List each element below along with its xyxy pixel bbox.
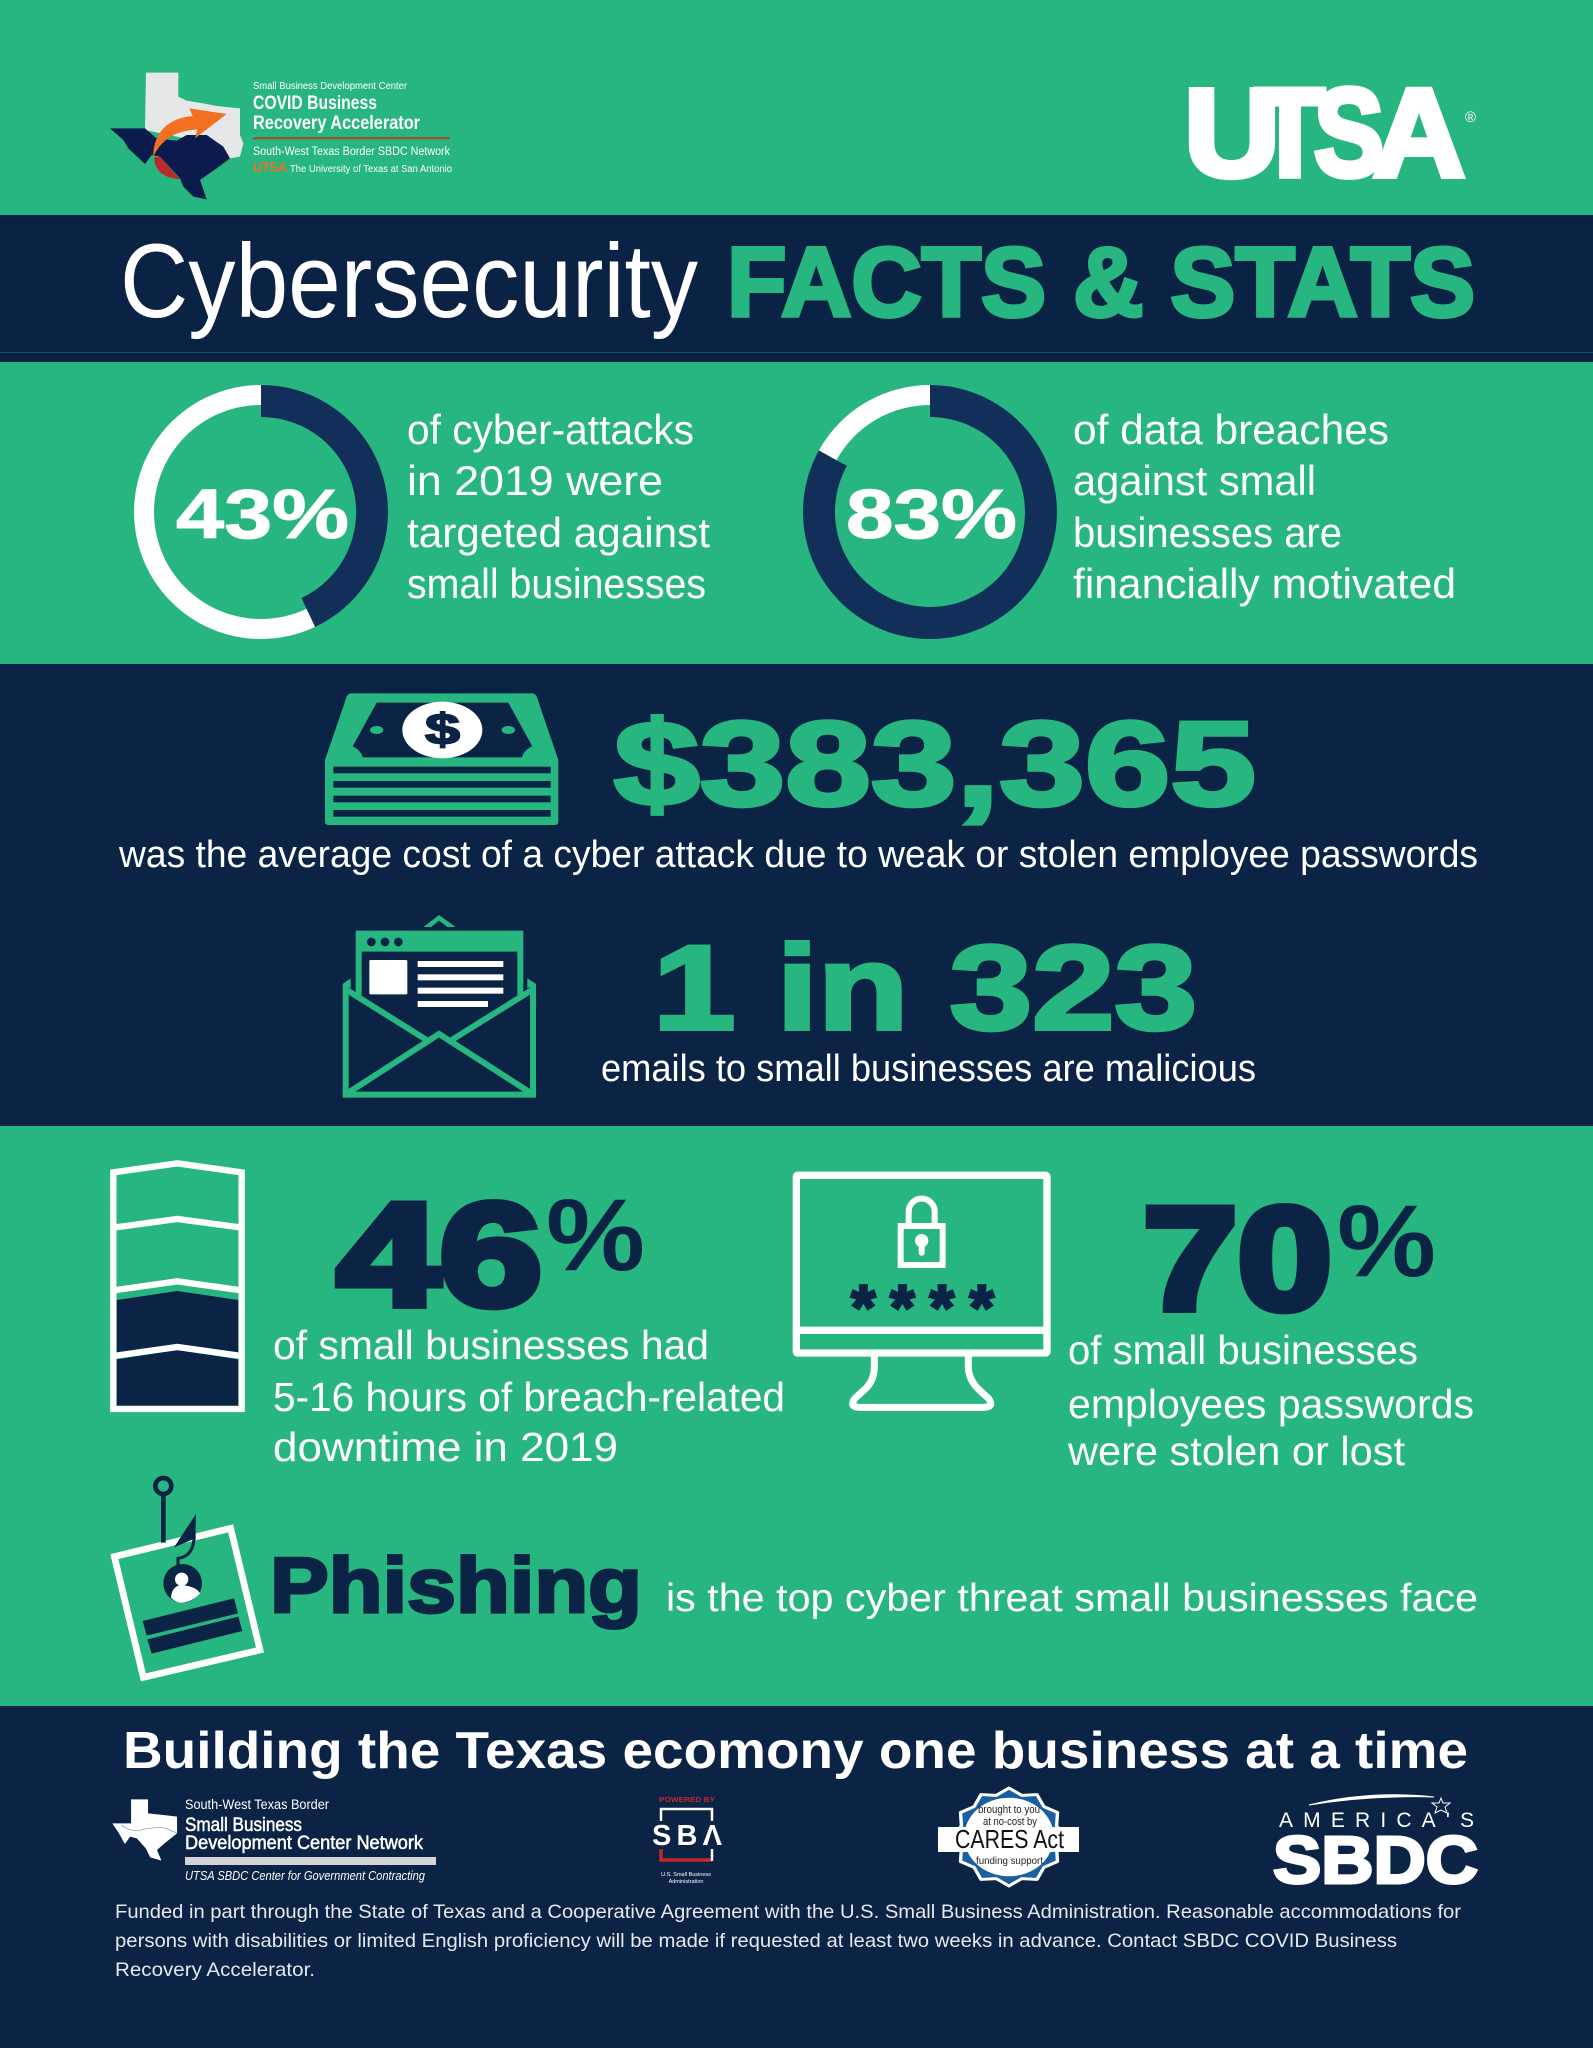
logo: COVID Business Recovery Accelerator: COVID Business	[253, 93, 377, 114]
donut chart: 43%	[134, 385, 388, 639]
logo: SBA	[652, 1795, 723, 1885]
text: 83% description: against small	[1073, 457, 1316, 504]
logo: South-West Texas Border SBDC Network: South-West Texas Border	[185, 1797, 329, 1812]
stat: $383,365	[118, 697, 1478, 876]
logo: COVID Business Recovery Accelerator: The University of Texas at San Antonio	[290, 164, 452, 175]
stat: Phishing: Phishing	[270, 1541, 642, 1629]
logo: South-West Texas Border SBDC Network: UTSA SBDC Center for Government Contracting	[185, 1869, 425, 1883]
text: 83% description	[1073, 406, 1456, 607]
logo: CARES Act funding support badge	[938, 1788, 1079, 1886]
logo: COVID Business Recovery Accelerator: UTSA	[253, 159, 287, 175]
logo: SBA: SBΛ	[652, 1820, 723, 1852]
logo: South-West Texas Border SBDC Network	[112, 1797, 436, 1883]
icon: money stack	[325, 684, 558, 825]
stat: 46%: 5-16 hours of breach-related	[273, 1374, 785, 1420]
icon: monitor with password	[796, 1175, 1047, 1407]
text: funding disclaimer	[115, 1901, 1462, 1981]
text: 83% description: of data breaches	[1073, 406, 1389, 453]
stat: 46%: 46	[337, 1173, 542, 1336]
logo: UTSA: U	[1184, 64, 1280, 203]
logo: COVID Business Recovery Accelerator: Small Business Development Center	[253, 80, 407, 92]
icon: monitor with password: ****	[851, 1273, 994, 1343]
logo: UTSA	[1184, 64, 1476, 203]
title	[120, 223, 1475, 340]
logo: CARES Act funding support badge: CARES Act	[955, 1824, 1065, 1854]
text: 83% description: businesses are	[1073, 509, 1342, 556]
heading: footer slogan: Building the Texas ecomony one business at a time	[123, 1722, 1468, 1780]
logo: COVID Business Recovery Accelerator: South-West Texas Border SBDC Network	[253, 146, 450, 158]
stat: 70%: %	[1337, 1184, 1436, 1298]
logo: America's SBDC: AMERICA'S	[1279, 1809, 1474, 1832]
stat: $383,365: $383,365	[614, 697, 1256, 831]
logo: SBA: Administration	[669, 1879, 703, 1885]
logo: COVID Business Recovery Accelerator	[110, 73, 452, 199]
panel: 83% stat	[803, 385, 1456, 639]
text: 43% description: small businesses	[407, 560, 706, 607]
stat: $383,365: was the average cost of a cyber attack due to weak or stolen employee passwords	[118, 834, 1478, 876]
stat: 70%	[1067, 1177, 1474, 1474]
stat: 46%	[273, 1173, 785, 1470]
stat: 46%: downtime in 2019	[273, 1424, 618, 1470]
logo: America's SBDC	[1273, 1795, 1478, 1898]
logo: UTSA: ®	[1465, 109, 1476, 126]
stat: 70%: 70	[1143, 1177, 1332, 1340]
logo: CARES Act funding support badge: at no-cost by	[983, 1816, 1037, 1828]
stat: 70%: of small businesses	[1068, 1327, 1418, 1373]
text: 43% description	[407, 406, 710, 607]
logo: South-West Texas Border SBDC Network: Small Business	[185, 1815, 302, 1836]
logo: CARES Act funding support badge: brought to you	[978, 1804, 1040, 1816]
text: funding disclaimer: Recovery Accelerator.	[115, 1959, 315, 1981]
icon: battery-style downtime gauge	[113, 1163, 242, 1409]
logo: America's SBDC: SBDC	[1273, 1823, 1478, 1898]
text: 43% description: of cyber-attacks	[407, 406, 694, 453]
logo: CARES Act funding support badge: funding support	[976, 1856, 1043, 1867]
stat: 1 in 323	[601, 921, 1256, 1090]
text: funding disclaimer: Funded in part through the State of Texas and a Cooperative Agreement with the U.S. Small Business Administration. Reasonable accommodations for	[115, 1901, 1462, 1923]
icon: phishing hook and profile card	[114, 1478, 260, 1677]
icon: money stack: $	[425, 706, 460, 754]
logo: COVID Business Recovery Accelerator: Recovery Accelerator	[253, 113, 421, 134]
donut chart: 43%: 43%	[176, 475, 349, 553]
logo: SBA: POWERED BY	[659, 1795, 715, 1804]
text: 83% description: financially motivated	[1073, 560, 1456, 607]
logo: UTSA: T	[1255, 64, 1325, 203]
stat: 46%: %	[546, 1178, 645, 1292]
text: funding disclaimer: persons with disabilities or limited English proficiency will be made if requested at least two weeks in advance. Contact SBDC COVID Business	[115, 1930, 1397, 1952]
stat: 70%: were stolen or lost	[1067, 1428, 1406, 1474]
title: Cybersecurity	[120, 223, 698, 340]
stat: 70%: employees passwords	[1068, 1381, 1474, 1427]
title: FACTS & STATS	[727, 227, 1475, 337]
stat: 1 in 323: emails to small businesses are malicious	[601, 1048, 1256, 1090]
stat: Phishing: is the top cyber threat small businesses face	[666, 1577, 1478, 1620]
panel: 43% stat	[134, 385, 710, 639]
donut chart: 83%: 83%	[846, 475, 1017, 553]
stat: 1 in 323: 1 in 323	[653, 921, 1197, 1055]
logo: South-West Texas Border SBDC Network: Development Center Network	[185, 1833, 423, 1854]
text: 43% description: targeted against	[407, 509, 710, 556]
donut chart: 83%	[803, 385, 1057, 639]
logo: UTSA: A	[1373, 64, 1465, 203]
logo: UTSA: S	[1314, 64, 1384, 203]
text: 43% description: in 2019 were	[407, 457, 663, 504]
stat: Phishing	[270, 1541, 1478, 1629]
stat: 46%: of small businesses had	[273, 1322, 709, 1368]
icon: email envelope	[343, 915, 536, 1095]
logo: SBA: U.S. Small Business	[661, 1872, 711, 1878]
